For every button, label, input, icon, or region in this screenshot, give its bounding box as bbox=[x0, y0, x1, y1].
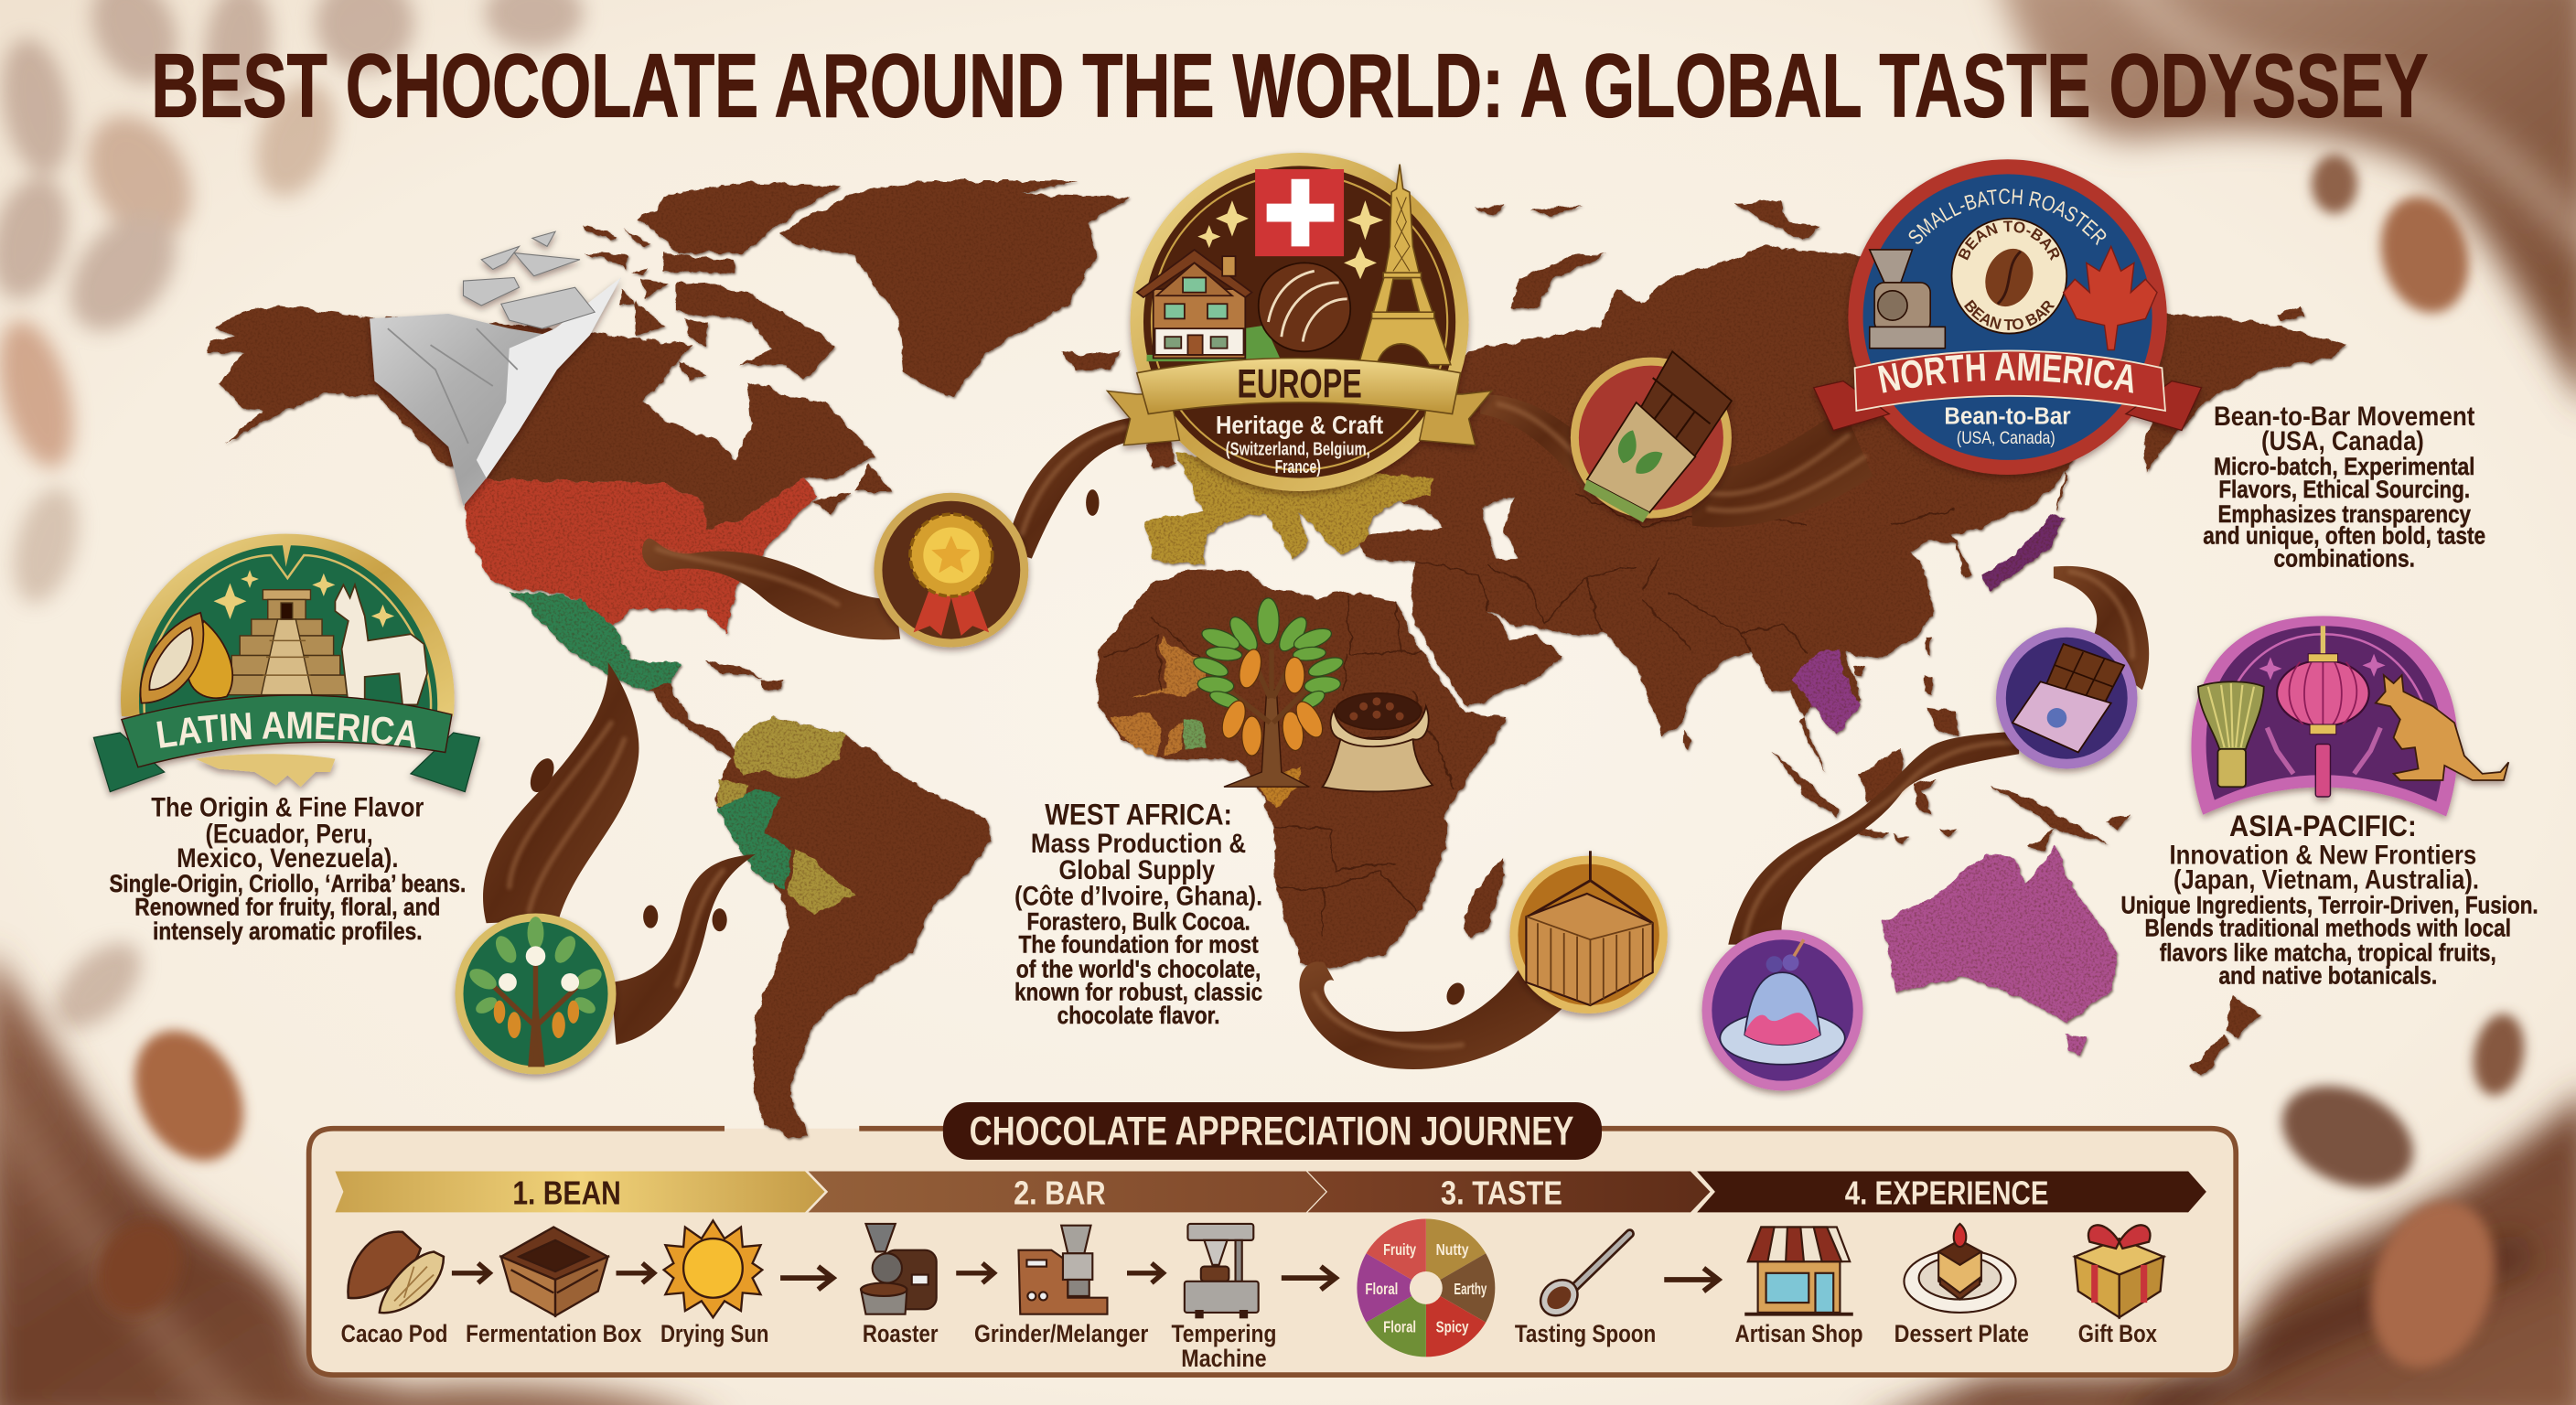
chart: flavor wheel: Floral bbox=[1365, 1280, 1398, 1298]
icon circle: ethical chocolate bar bbox=[1571, 351, 1732, 522]
arrow bbox=[1127, 1263, 1164, 1283]
text block: latin america: The Origin & Fine Flavor bbox=[151, 793, 424, 823]
north america badge text bbox=[1944, 402, 2071, 448]
step 4 experience chevron: 4. EXPERIENCE bbox=[1845, 1174, 2048, 1211]
botanical sprigs bbox=[2267, 728, 2380, 774]
step 1 bean chevron bbox=[335, 1171, 825, 1212]
badge: europe bbox=[1107, 153, 1492, 491]
chart: flavor wheel: Nutty bbox=[1436, 1240, 1469, 1259]
bean sack bbox=[1323, 693, 1433, 791]
icon: drying sun bbox=[664, 1220, 762, 1317]
icon: grinder melanger bbox=[1018, 1226, 1107, 1314]
text block: asia-pacific: (Japan, Vietnam, Australia). bbox=[2174, 865, 2479, 896]
north america foil wrapper bbox=[370, 231, 621, 506]
icon: fermentation box bbox=[501, 1228, 608, 1315]
text block: north america: Bean-to-Bar Movement bbox=[2214, 402, 2475, 432]
kangaroo bbox=[2376, 675, 2508, 780]
text block: latin america: intensely aromatic profiles. bbox=[153, 917, 423, 945]
new zealand bbox=[2190, 995, 2260, 1076]
chart: flavor wheel: Fruity bbox=[1383, 1240, 1416, 1259]
text block: latin america: (Ecuador, Peru, bbox=[206, 819, 373, 849]
arrow bbox=[1282, 1267, 1336, 1290]
text block: asia-pacific bbox=[2121, 810, 2538, 990]
asia bbox=[1315, 246, 2347, 774]
text block: latin america: Mexico, Venezuela). bbox=[177, 843, 399, 874]
matcha whisk bbox=[2198, 681, 2264, 787]
south america bbox=[714, 716, 991, 1139]
text block: north america: combinations. bbox=[2274, 545, 2415, 573]
cacao tree bbox=[1191, 598, 1346, 787]
icon labels: Cacao Pod bbox=[341, 1320, 447, 1347]
step 3 taste chevron bbox=[1308, 1171, 1711, 1212]
small batch arc text: SMALL-BATCH ROASTER bbox=[1908, 188, 2106, 245]
text block: latin america: Renowned for fruity, floral, and bbox=[134, 893, 440, 920]
stream highlights bbox=[510, 404, 2132, 1047]
newfoundland and nova scotia bbox=[813, 463, 892, 512]
africa illustration: cacao tree and bean sack bbox=[1191, 598, 1433, 791]
europe badge text: (Switzerland, Belgium, bbox=[1226, 438, 1370, 459]
europe badge text: France) bbox=[1275, 456, 1321, 477]
text block: north america: Micro-batch, Experimental bbox=[2214, 453, 2475, 480]
chart: flavor wheel: Earthy bbox=[1454, 1280, 1487, 1298]
europe ribbon: EUROPE bbox=[1237, 360, 1362, 407]
badge: latin america bbox=[90, 532, 484, 799]
icon circle: fusion dessert bbox=[1702, 929, 1863, 1090]
icon circle: cacao tree bbox=[455, 913, 616, 1074]
arrow bbox=[452, 1263, 489, 1283]
stars bbox=[1197, 200, 1383, 279]
panel title pill: CHOCOLATE APPRECIATION JOURNEY bbox=[970, 1108, 1574, 1154]
icon labels: Dessert Plate bbox=[1894, 1320, 2029, 1347]
text block: asia-pacific: flavors like matcha, tropical fruits, bbox=[2160, 939, 2496, 967]
chart: flavor wheel: Floral bbox=[1383, 1317, 1416, 1335]
chalet house bbox=[1137, 250, 1282, 361]
greenland bbox=[780, 181, 1129, 399]
icon labels: Gift Box bbox=[2078, 1320, 2157, 1347]
central america and caribbean bbox=[649, 660, 785, 759]
text block: asia-pacific: and native botanicals. bbox=[2218, 962, 2437, 990]
bean to bar seal: BEAN TO BAR bbox=[1964, 300, 2055, 330]
icon circle: gold medal bbox=[874, 493, 1028, 648]
europe ribbon bbox=[1107, 358, 1492, 445]
north america: alaska and canada bbox=[207, 306, 874, 529]
step 1 bean chevron: 1. BEAN bbox=[512, 1174, 621, 1211]
text block: asia-pacific: Innovation & New Frontiers bbox=[2169, 841, 2476, 871]
europe badge text bbox=[1216, 411, 1383, 477]
icon labels: Artisan Shop bbox=[1734, 1320, 1863, 1347]
tasmania bbox=[2066, 1035, 2087, 1055]
roaster bbox=[1870, 250, 1945, 349]
united states bbox=[463, 478, 817, 634]
maple leaf bbox=[2064, 246, 2157, 350]
text block: west africa: known for robust, classic bbox=[1014, 979, 1262, 1006]
truffle bbox=[1259, 263, 1350, 351]
bean to bar seal bbox=[1950, 218, 2067, 335]
icon labels: Tempering bbox=[1171, 1320, 1276, 1347]
japan bbox=[1981, 516, 2064, 592]
eiffel tower bbox=[1358, 165, 1451, 365]
icon: gift box bbox=[2075, 1225, 2163, 1317]
text block: north america bbox=[2203, 402, 2485, 573]
icon labels: Drying Sun bbox=[660, 1320, 769, 1347]
icon labels: Machine bbox=[1181, 1345, 1267, 1372]
uk and ireland bbox=[1145, 440, 1176, 467]
text block: latin america bbox=[109, 793, 466, 945]
chart: flavor wheel bbox=[1357, 1219, 1495, 1357]
arrow bbox=[780, 1267, 833, 1290]
icon: tempering machine bbox=[1185, 1224, 1259, 1317]
icon circle: shipping container bbox=[1509, 851, 1668, 1014]
text block: asia-pacific: Blends traditional methods with local bbox=[2145, 915, 2511, 942]
arrow bbox=[1664, 1268, 1719, 1292]
text block: west africa: Mass Production & bbox=[1031, 829, 1246, 859]
cacao pod bbox=[140, 613, 232, 703]
pyramid bbox=[229, 590, 353, 695]
asia country borders bbox=[1416, 493, 1955, 652]
europe badge text: Heritage & Craft bbox=[1216, 411, 1383, 439]
icon labels: Roaster bbox=[863, 1320, 939, 1347]
text block: west africa: Global Supply bbox=[1058, 855, 1216, 885]
icon labels: Fermentation Box bbox=[466, 1320, 641, 1347]
bean to bar seal: BEAN TO-BAR bbox=[1958, 220, 2060, 261]
text block: north america: and unique, often bold, taste bbox=[2203, 521, 2485, 549]
text block: west africa: Forastero, Bulk Cocoa. bbox=[1026, 907, 1250, 935]
text block: west africa: The foundation for most bbox=[1018, 931, 1259, 959]
north america ribbon: NORTH AMERICA bbox=[1878, 353, 2133, 393]
mexico bbox=[510, 592, 682, 690]
indonesia and philippines bbox=[1773, 677, 2129, 851]
badge: north america bbox=[1812, 158, 2203, 481]
step 3 taste chevron: 3. TASTE bbox=[1441, 1174, 1562, 1211]
step 4 experience chevron bbox=[1697, 1171, 2206, 1212]
panel title pill bbox=[943, 1102, 1602, 1160]
text block: west africa bbox=[1014, 799, 1262, 1029]
text block: west africa: (Côte d’Ivoire, Ghana). bbox=[1014, 882, 1262, 912]
text block: west africa: WEST AFRICA: bbox=[1045, 799, 1232, 831]
text block: north america: (USA, Canada) bbox=[2261, 426, 2424, 456]
swirl shapes bbox=[0, 949, 723, 1405]
text block: asia-pacific: ASIA-PACIFIC: bbox=[2229, 810, 2417, 842]
icon: roaster bbox=[861, 1224, 937, 1314]
swiss flag bbox=[1255, 169, 1344, 256]
australia bbox=[1883, 848, 2118, 1024]
panel frame bbox=[309, 1129, 2236, 1375]
paper lantern bbox=[2277, 626, 2369, 797]
thailand and vietnam bbox=[1792, 649, 1860, 735]
icon: cacao pod bbox=[348, 1232, 444, 1313]
arrow bbox=[956, 1263, 994, 1283]
latin america ribbon: LATIN AMERICA bbox=[156, 712, 416, 748]
step 2 bar chevron: 2. BAR bbox=[1014, 1174, 1106, 1211]
icon labels bbox=[341, 1320, 2157, 1372]
north america badge text: (USA, Canada) bbox=[1957, 428, 2055, 448]
arrow bbox=[616, 1263, 654, 1283]
panel: chocolate appreciation journey bbox=[309, 1102, 2236, 1375]
north america badge text: Bean-to-Bar bbox=[1944, 402, 2071, 429]
icon labels: Tasting Spoon bbox=[1515, 1320, 1656, 1347]
text block: latin america: Single-Origin, Criollo, ‘Arriba’ beans. bbox=[109, 870, 466, 897]
text block: west africa: chocolate flavor. bbox=[1057, 1002, 1219, 1029]
icon: artisan shop bbox=[1744, 1228, 1853, 1314]
text block: north america: Emphasizes transparency bbox=[2217, 500, 2471, 528]
icon: tasting spoon bbox=[1533, 1234, 1630, 1323]
world map: chocolate continents bbox=[207, 181, 2347, 1139]
north america ribbon bbox=[1812, 349, 2203, 437]
llama bbox=[335, 585, 427, 704]
iceland bbox=[1063, 350, 1121, 370]
icon labels: Grinder/Melanger bbox=[974, 1320, 1149, 1347]
madagascar bbox=[1464, 857, 1505, 938]
africa bbox=[1098, 570, 1507, 970]
icon: dessert plate bbox=[1904, 1224, 2016, 1313]
canadian arctic islands bbox=[584, 182, 842, 381]
badge: asia-pacific bbox=[2191, 616, 2508, 817]
europe: heritage gold bbox=[1145, 452, 1434, 565]
text block: west africa: of the world's chocolate, bbox=[1016, 956, 1261, 983]
latin america ribbon bbox=[90, 694, 484, 799]
icon circle: asian chocolate bar bbox=[1996, 627, 2137, 768]
sakhalin, sri lanka, taiwan, arctic russian islands bbox=[1474, 200, 2303, 749]
step 2 bar chevron bbox=[809, 1171, 1326, 1212]
chart: flavor wheel: Spicy bbox=[1436, 1317, 1469, 1335]
text block: north america: Flavors, Ethical Sourcing. bbox=[2218, 476, 2470, 503]
chocolate streams connecting the badges bbox=[483, 394, 2149, 1069]
